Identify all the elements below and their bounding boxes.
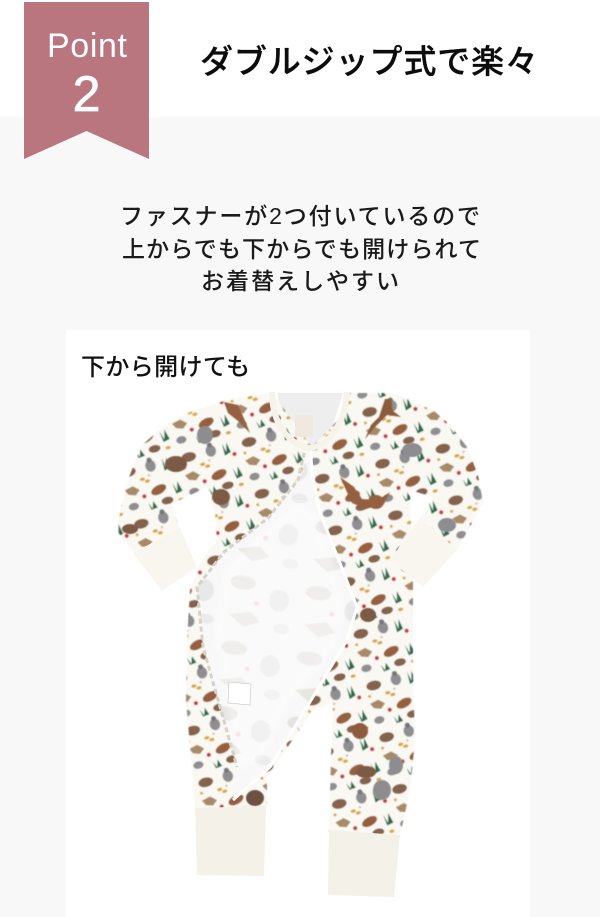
right leg cuff <box>328 830 400 897</box>
header band <box>0 0 600 117</box>
zipper edge right <box>233 447 357 800</box>
badge label: Point: Point <box>47 27 128 65</box>
photo caption: 下から開けても <box>81 354 250 381</box>
description text: 上からでも下からでも開けられて <box>122 236 481 262</box>
lining soft shading <box>215 500 345 770</box>
right sleeve cuff <box>390 518 457 587</box>
description text <box>120 203 481 294</box>
badge number: 2: 2 <box>73 66 100 122</box>
photo panel <box>66 330 530 917</box>
neck collar <box>272 392 347 448</box>
care label <box>228 682 251 705</box>
garment white inner lining with opening <box>197 447 357 800</box>
neck tag <box>295 415 313 437</box>
garment inside neck <box>277 393 343 465</box>
garment printed body and sleeves <box>117 393 483 836</box>
description text: ファスナーが2つ付いているので <box>120 203 480 229</box>
zipper edge left <box>197 445 306 767</box>
description text: お着替えしやすい <box>201 268 399 294</box>
left sleeve cuff <box>133 528 197 591</box>
title: ダブルジップ式で楽々 <box>200 43 538 80</box>
point ribbon badge <box>24 2 149 159</box>
photo: open zip romper <box>117 392 483 897</box>
left leg cuff <box>195 806 266 876</box>
kangaroo and bear motifs <box>122 399 456 806</box>
